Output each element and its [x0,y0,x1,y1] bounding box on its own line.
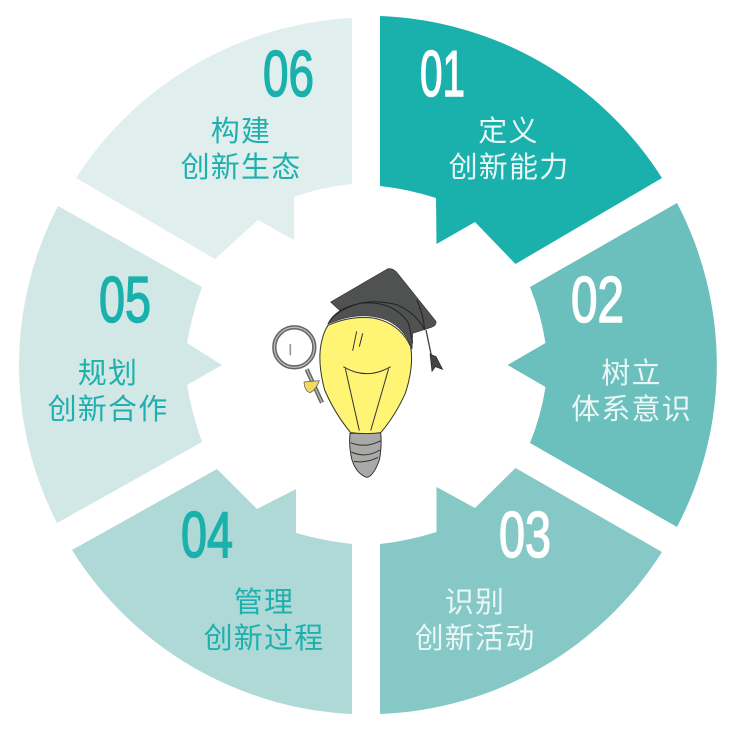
segment 03: identify innovation activities [380,468,662,714]
segment 03: identify innovation activities: 创新活动 [415,622,535,655]
segment 06: build innovation ecosystem: 06 [263,37,314,110]
segment 03: identify innovation activities: 03 [499,498,551,571]
segment 02: establish awareness system: 树立 [601,357,662,390]
segment 01: define innovation capability: 定义 [478,115,539,148]
icon: graduation cap [328,269,443,371]
icon: light bulb with graduation cap and magnifier [274,269,443,477]
icon: magnifying glass [274,327,322,403]
segment 01: define innovation capability [380,16,662,264]
segment 05: plan innovation cooperation: 规划 [78,357,138,390]
segment 05: plan innovation cooperation: 创新合作 [48,393,168,426]
segment 04: manage innovation process: 管理 [234,586,294,619]
segment 03: identify innovation activities: 识别 [445,587,505,619]
segment 04: manage innovation process [72,469,352,714]
segment 02: establish awareness system: 体系意识 [571,393,692,426]
segment 06: build innovation ecosystem: 构建 [211,115,271,148]
segment 04: manage innovation process: 04 [181,498,233,571]
icon: bulb screw base [350,433,381,477]
segment 01: define innovation capability: 创新能力 [449,151,569,184]
segment 02: establish awareness system [508,203,717,527]
segment 06: build innovation ecosystem [76,18,352,259]
segment 05: plan innovation cooperation: 05 [99,263,151,336]
icon: bulb glass with smile [320,317,412,434]
segment 04: manage innovation process: 创新过程 [204,622,324,655]
segment 06: build innovation ecosystem: 创新生态 [181,151,301,184]
segment 02: establish awareness system: 02 [571,263,624,336]
segment 05: plan innovation cooperation [19,206,222,523]
segment 01: define innovation capability: 01 [420,37,465,110]
